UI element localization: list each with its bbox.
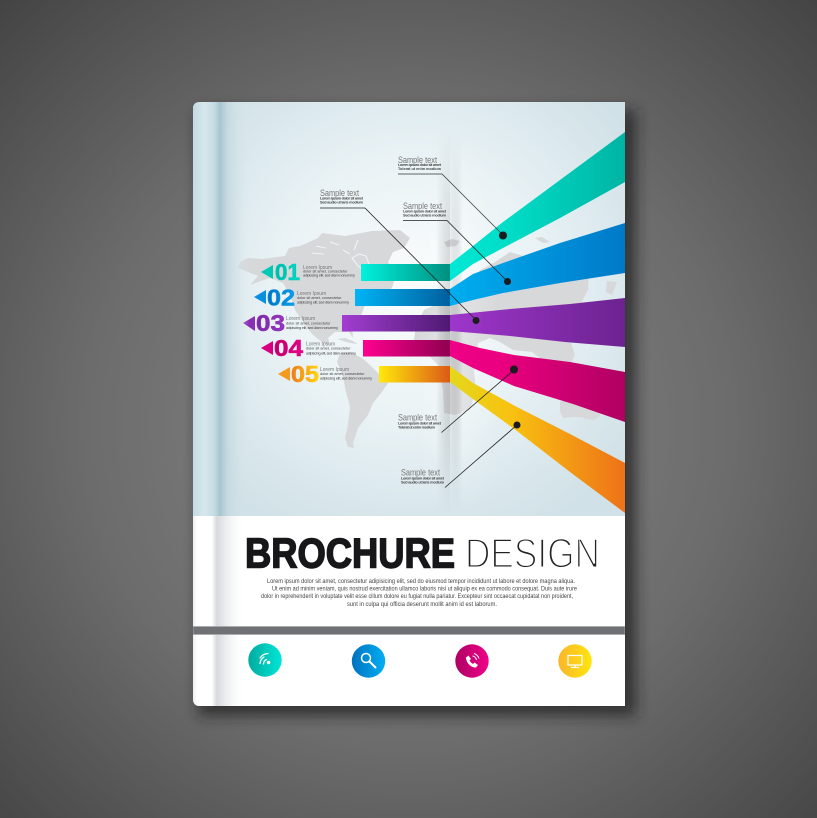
callout 4 details: Lorem ipsum dolor sit amet	[398, 422, 442, 426]
callout 2	[320, 188, 480, 324]
item 05 text: Lorem Ipsum	[320, 367, 349, 373]
callout 3 details: Lorem ipsum dolor sit amet	[403, 210, 447, 214]
bar 03	[342, 315, 450, 332]
item 01	[261, 264, 355, 280]
bar 05	[379, 366, 450, 382]
body paragraph	[261, 578, 577, 608]
spine on white area	[193, 516, 245, 706]
callout 4 dot	[510, 366, 518, 374]
callout 1 details: Tolerat ut enim modium	[398, 167, 442, 171]
callout 2 details	[320, 196, 364, 204]
body paragraph: sunt in culpa qui officia deserunt mollit anim id est laborum.	[347, 601, 497, 608]
item 05 text: dolor sit amet, consectetur	[320, 372, 365, 376]
world map	[238, 230, 617, 448]
callout 5 details: Sed audio ut laris modium	[401, 480, 445, 484]
callout 3 details	[403, 210, 447, 218]
item 03 text	[286, 316, 338, 330]
item 02 text: adipiscing elit, sed diam nonummy	[297, 300, 349, 304]
callout 4	[398, 366, 518, 432]
callout 1	[398, 155, 507, 240]
icon: magnifier	[352, 644, 385, 678]
callout 3 details: Sed audio ut laris modium	[403, 214, 447, 218]
ribbon blue	[450, 223, 625, 306]
ribbon purple	[450, 298, 625, 347]
item 02 text: dolor sit amet, consectetur	[297, 296, 342, 300]
fold left	[438, 161, 450, 490]
callout 1 details: Lorem ipsum dolor sit amet	[398, 163, 442, 167]
callout 5 details: Lorem ipsum dolor sit amet	[401, 476, 445, 480]
centre fold shading	[438, 161, 470, 490]
bar 02	[355, 289, 450, 306]
item 01 text: Lorem Ipsum	[303, 265, 332, 271]
arrow 02	[254, 290, 266, 304]
item 04 text: Lorem Ipsum	[306, 342, 335, 348]
map: northern islands	[444, 237, 617, 295]
book shadow	[198, 110, 636, 716]
arrow 05	[278, 367, 290, 381]
callout 4 details	[398, 422, 442, 430]
icon: monitor	[558, 644, 592, 678]
callout 2 dot	[472, 317, 480, 324]
item 01 text: adipiscing elit, sed diam nonummy	[303, 274, 355, 278]
callout 4 heading: Sample text	[398, 412, 437, 424]
item 03	[243, 314, 338, 332]
callout 3 dot	[504, 278, 511, 285]
item 01 text	[303, 265, 355, 278]
item 01 text: dolor sit amet, consectetur	[303, 270, 348, 274]
left bars	[342, 264, 450, 382]
callout 5 leader	[445, 425, 517, 488]
map: canadian inlets	[312, 240, 369, 270]
item 03 text: dolor sit amet, consectetur	[286, 322, 331, 326]
item 04 text	[306, 342, 356, 356]
callout 3	[403, 201, 511, 285]
item 02 text: Lorem Ipsum	[297, 291, 326, 297]
number 02: 02	[267, 284, 295, 310]
brochure cover	[193, 102, 625, 706]
arrow 01	[261, 265, 273, 279]
body paragraph: Ut enim ad minim veniam, quis nostrud exercitation ullamco laboris nisi ut aliquip ex ea commodo consequat. Duis aute irure	[272, 586, 577, 592]
callout 4 leader	[442, 370, 514, 432]
title bold word: BROCHURE	[245, 530, 455, 576]
callout 2 details: Lorem ipsum dolor sit amet	[320, 196, 364, 200]
bar 04	[363, 340, 450, 356]
item 05 text: adipiscing elit, sed diam nonummy	[320, 376, 372, 380]
callout 1 heading: Sample text	[398, 155, 437, 166]
arrow 03	[243, 316, 255, 331]
callout 1 details	[398, 163, 442, 171]
callout 2 leader	[320, 208, 476, 320]
map: africa and eurasia	[414, 250, 590, 415]
item 04 text: dolor sit amet, consectetur	[306, 346, 351, 350]
icon: phone	[455, 644, 489, 678]
title light word: DESIGN	[465, 530, 600, 576]
callout 2 heading: Sample text	[320, 188, 359, 199]
body paragraph: Lorem ipsum dolor sit amet, consectetur adipisicing elit, sed do eiusmod tempor incididunt ut labore et dolore magna aliqua.	[267, 578, 575, 585]
callout 1 dot	[499, 232, 507, 240]
item 04 text: adipiscing elit, sed diam nonummy	[306, 352, 356, 356]
item 04	[261, 335, 356, 361]
number 05: 05	[291, 361, 319, 387]
callout 5 heading: Sample text	[401, 468, 440, 478]
fold right	[450, 175, 470, 476]
callout 3 heading: Sample text	[403, 201, 442, 212]
body paragraph: dolor in reprehenderit in voluptate velit esse cillum dolore eu fugiat nulla pariatur. Excepteur sint occaecat cupidatat non proident,	[261, 593, 573, 600]
grey band	[193, 626, 625, 634]
number 03: 03	[256, 310, 285, 336]
ribbon yellow orange	[450, 366, 625, 513]
number 01: 01	[275, 259, 300, 285]
top image panel	[193, 102, 625, 516]
ribbon teal	[450, 132, 625, 281]
callout 3 leader	[403, 220, 507, 281]
title	[245, 530, 600, 576]
callout 5	[401, 422, 520, 488]
ribbon magenta	[450, 340, 625, 422]
callout 5 dot	[514, 422, 520, 428]
arrow 04	[261, 341, 273, 355]
map: australia	[560, 401, 600, 420]
callout 4 details: Tolerat ut enim modium	[398, 426, 436, 430]
number 04: 04	[274, 335, 303, 361]
spine highlight on image	[193, 102, 249, 516]
bar 01	[361, 264, 450, 281]
white cover base	[193, 102, 625, 706]
map: north america	[238, 230, 410, 345]
item 05	[278, 361, 372, 387]
callout 2 details: Sed audio ut laris modium	[320, 200, 364, 204]
map: south america	[337, 352, 388, 448]
item 02 text	[297, 291, 349, 304]
ribbons right	[450, 132, 625, 513]
image sky	[193, 102, 625, 516]
map: caribbean	[337, 338, 358, 344]
callout 1 leader	[398, 174, 503, 235]
icon: wifi	[248, 643, 282, 677]
callout 5 details	[401, 476, 445, 484]
item 02	[254, 289, 349, 306]
item 05 text	[320, 367, 372, 380]
item 03 text: adipiscing elit, sed diam nonummy	[286, 326, 338, 330]
item 03 text: Lorem Ipsum	[286, 316, 315, 322]
